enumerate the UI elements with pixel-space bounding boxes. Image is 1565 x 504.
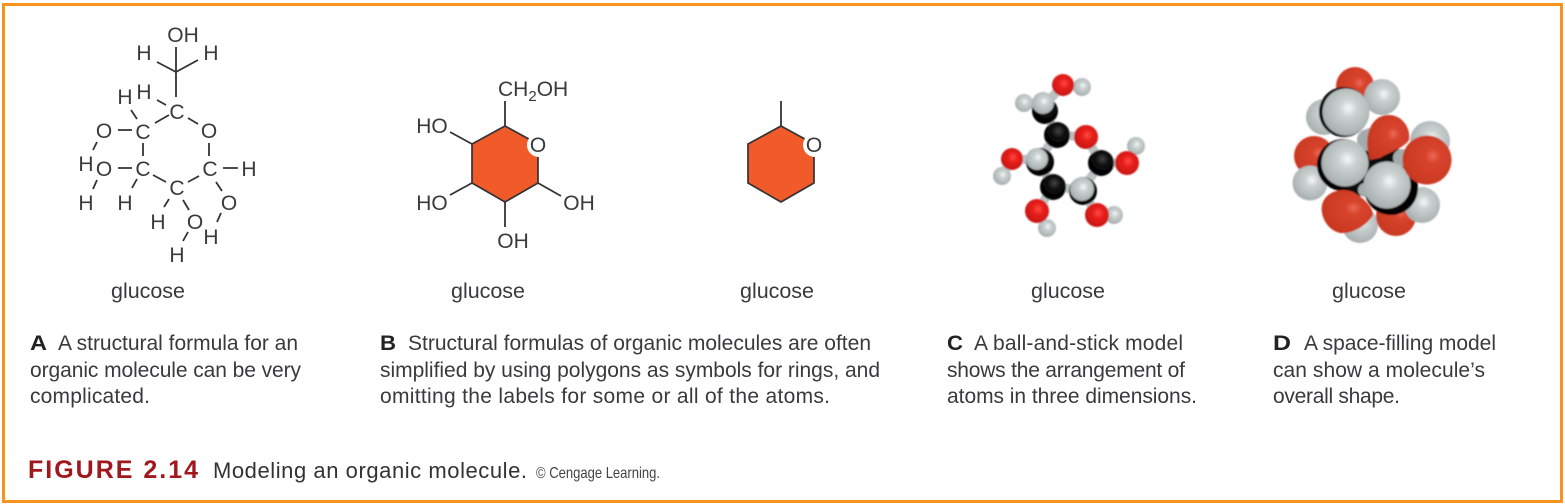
caption D: overall shape. [1273,385,1400,408]
caption A: complicated. [30,385,150,408]
caption D [1273,332,1496,408]
label: glucose C: glucose [1031,279,1105,303]
figure caption: FIGURE 2.14 [28,456,198,484]
caption D: D [1273,332,1291,355]
structural formula atoms and bonds: C [202,158,218,181]
figure caption [28,456,660,484]
panel A: structural formula [30,24,302,408]
caption B [380,332,880,408]
caption C: C [947,332,963,355]
structural formula atoms and bonds: O [96,158,112,181]
label: glucose A: glucose [111,279,185,303]
label: glucose B1: glucose [451,279,525,303]
structural formula atoms and bonds [78,24,257,267]
structural formula atoms and bonds: OH [167,24,199,47]
figure caption: © Cengage Learning. [536,465,660,482]
caption A: A [30,332,47,355]
panel B: simplified polygon formulas [380,78,880,408]
caption D: A space-filling model [1304,332,1496,355]
panel C: ball-and-stick model [947,74,1197,408]
label: glucose B2: glucose [740,279,814,303]
polygon formula with labels: CH [498,78,528,101]
caption C: shows the arrangement of [947,359,1185,382]
structural formula atoms and bonds: O [221,192,237,215]
polygon formula without labels: O [806,134,822,157]
structural formula atoms and bonds: H [136,81,152,104]
polygon formula with labels: OH [563,192,595,215]
caption C: atoms in three dimensions. [947,385,1197,408]
caption A: organic molecule can be very [30,359,302,382]
structural formula atoms and bonds: C [169,177,185,200]
structural formula atoms and bonds: H [150,211,166,234]
structural formula atoms and bonds: O [96,120,112,143]
caption D: can show a molecule’s [1273,359,1485,382]
figure caption: Modeling an organic molecule. [213,458,527,483]
structural formula atoms and bonds: H [78,153,94,176]
polygon formula without labels [748,101,827,202]
panel D: space-filling model [1273,67,1496,408]
polygon formula with labels: HO [416,192,448,215]
caption B: simplified by using polygons as symbols for rings, and [380,359,880,382]
caption B: Structural formulas of organic molecules are often [408,332,871,355]
caption A: A structural formula for an [58,332,298,355]
structural formula atoms and bonds: C [169,101,185,124]
structural formula atoms and bonds: H [136,42,152,65]
label: glucose D: glucose [1332,279,1406,303]
structural formula atoms and bonds: H [203,226,219,249]
structural formula atoms and bonds: O [187,211,203,234]
structural formula atoms and bonds: O [201,120,217,143]
caption B: B [380,332,396,355]
caption C [947,332,1197,408]
space-filling glucose model [1292,67,1452,243]
polygon formula with labels: O [530,134,546,157]
polygon formula with labels [416,78,595,253]
structural formula atoms and bonds: C [135,158,151,181]
structural formula atoms and bonds: H [117,192,133,215]
structural formula atoms and bonds: H [78,192,94,215]
polygon formula with labels: OH [497,230,529,253]
caption B: omitting the labels for some or all of the atoms. [380,385,830,408]
structural formula atoms and bonds: H [117,86,133,109]
structural formula atoms and bonds: H [203,42,219,65]
caption C: A ball-and-stick model [974,332,1183,355]
structural formula atoms and bonds: H [169,244,185,267]
polygon formula with labels: OH [537,78,568,101]
caption A [30,332,302,408]
structural formula atoms and bonds: C [135,121,151,144]
structural formula atoms and bonds: H [241,158,257,181]
polygon formula with labels: 2 [528,88,537,105]
polygon formula with labels: HO [416,115,448,138]
ball-and-stick glucose model [993,74,1145,237]
